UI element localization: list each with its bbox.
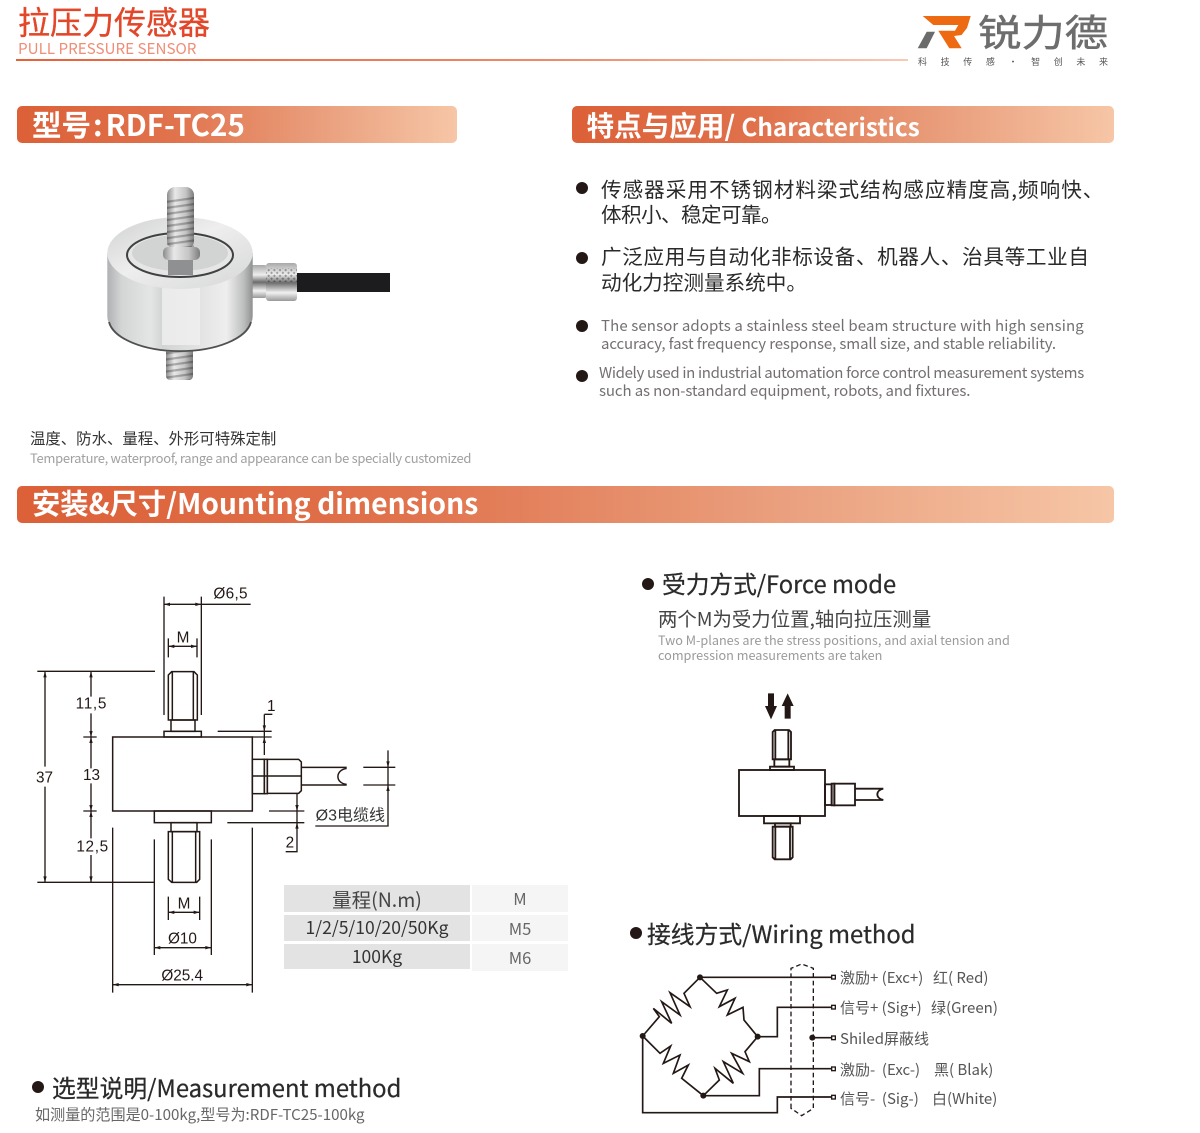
label: red: 红( Red) [933,967,988,988]
product photo: sensor [107,187,390,380]
table row 3: 100Kg [352,944,402,969]
wiring labels [840,967,998,1109]
dimension labels: 13 [83,767,100,784]
label: signal minus: 信号- (Sig-) [840,1088,919,1109]
cable gland [248,263,297,301]
text: force mode chinese: 两个M为受力位置,轴向拉压测量 [658,603,931,632]
dimension labels: Ø10 [168,930,197,947]
arrows: tension and compression [765,693,794,719]
bullet 1 chinese [576,173,1104,228]
table row 2: 1/2/5/10/20/50Kg [306,915,448,940]
label: excitation plus: 激励+ (Exc+) [840,967,923,988]
dimension labels: Ø6,5 [213,586,248,603]
label: signal plus: 信号+ (Sig+) [840,997,922,1018]
dimension labels: 37 [36,769,53,786]
banner: mounting dimensions [16,486,1114,523]
dimension labels: M [178,895,190,912]
label: black: 黑( Blak) [934,1059,993,1080]
label: white: 白(White) [932,1088,997,1109]
shield dashed [791,964,813,1116]
table row 3: M6 [509,945,531,969]
bottom bolt [166,345,193,380]
signal wires [643,977,832,1113]
dimension labels: Ø25.4 [161,968,204,985]
banner: characteristics [572,106,1114,143]
banner: model [16,106,457,143]
label: shield: Shiled屏蔽线 [840,1028,929,1049]
dimension labels: 12,5 [76,838,109,855]
heading: measurement method: 选型说明/Measurement method [52,1068,401,1104]
cylinder body [107,217,253,352]
bullet 3 english: The sensor adopts a stainless steel beam structure with high sensing [601,315,1084,336]
nodes [640,974,815,1099]
dimension labels: 1 [267,698,276,715]
bullet list: characteristics [576,173,1104,401]
banner: mounting dimensions: 安装&尺寸/Mounting dimensions [32,482,478,523]
banner: characteristics: 特点与应用/ Characteristics [586,104,920,144]
note: customisation english: Temperature, waterproof, range and appearance can be specially customized [30,448,471,467]
sensor outline [113,672,347,882]
top bolt [163,187,200,260]
heading: force mode: 受力方式/Force mode [662,566,896,600]
text: force mode english: Two M-planes are the stress positions, and axial tension and [658,630,1010,649]
bullet 1 chinese: 体积小、稳定可靠。 [601,198,781,228]
label: excitation minus: 激励- (Exc-) [840,1059,920,1080]
bullet 3 english: accuracy, fast frequency response, small size, and stable reliability. [601,333,1056,354]
bullet 2 chinese [576,240,1090,296]
banner: model: 型号:RDF-TC25 [32,103,245,145]
bullet 2 chinese: 广泛应用与自动化非标设备、机器人、治具等工业自 [601,240,1090,270]
table row 2: M5 [509,916,531,940]
subtitle: PULL PRESSURE SENSOR [18,37,196,59]
logo [918,3,1108,68]
dimension labels [36,586,385,985]
dimension lines [37,597,395,993]
dimension labels: 11,5 [76,696,107,713]
sensor outline [739,730,883,859]
bullet 4 english [576,362,1084,401]
table row 2 [284,915,568,941]
logo: 锐力德 [978,3,1108,57]
resistor bridge [643,977,758,1096]
table row 3 [284,944,568,971]
dimension labels: 2 [286,835,294,852]
header rule [16,59,908,61]
logo: 科技传感·智创未来 [918,55,1108,68]
table: range and thread [284,884,568,971]
heading: wiring method: 接线方式/Wiring method [647,914,916,950]
terminals [832,975,835,1099]
dimension labels: Ø3电缆线 [316,807,385,825]
bullet 2 chinese: 动化力控测量系统中。 [601,266,807,296]
arrowheads [43,603,390,986]
cable [294,273,390,292]
text: force mode english: compression measurements are taken [658,645,882,664]
table row 1 [284,884,568,913]
note: customisation: 温度、防水、量程、外形可特殊定制 [30,427,276,449]
bullet 4 english: Widely used in industrial automation force control measurement systems [599,362,1084,383]
bullet 4 english: such as non-standard equipment, robots, and fixtures. [599,380,970,401]
label: green: 绿(Green) [931,997,998,1018]
dimension labels: M [177,630,189,647]
text: measurement example: 如测量的范围是0-100kg,型号为:RDF-TC25-100kg [35,1102,365,1124]
bullet 1 chinese: 传感器采用不锈钢材料梁式结构感应精度高,频响快、 [601,173,1104,203]
table row 1: 量程(N.m) [332,884,422,913]
text: force mode english [658,630,1010,664]
table row 1: M [513,886,527,910]
bullet 3 english [576,315,1084,354]
